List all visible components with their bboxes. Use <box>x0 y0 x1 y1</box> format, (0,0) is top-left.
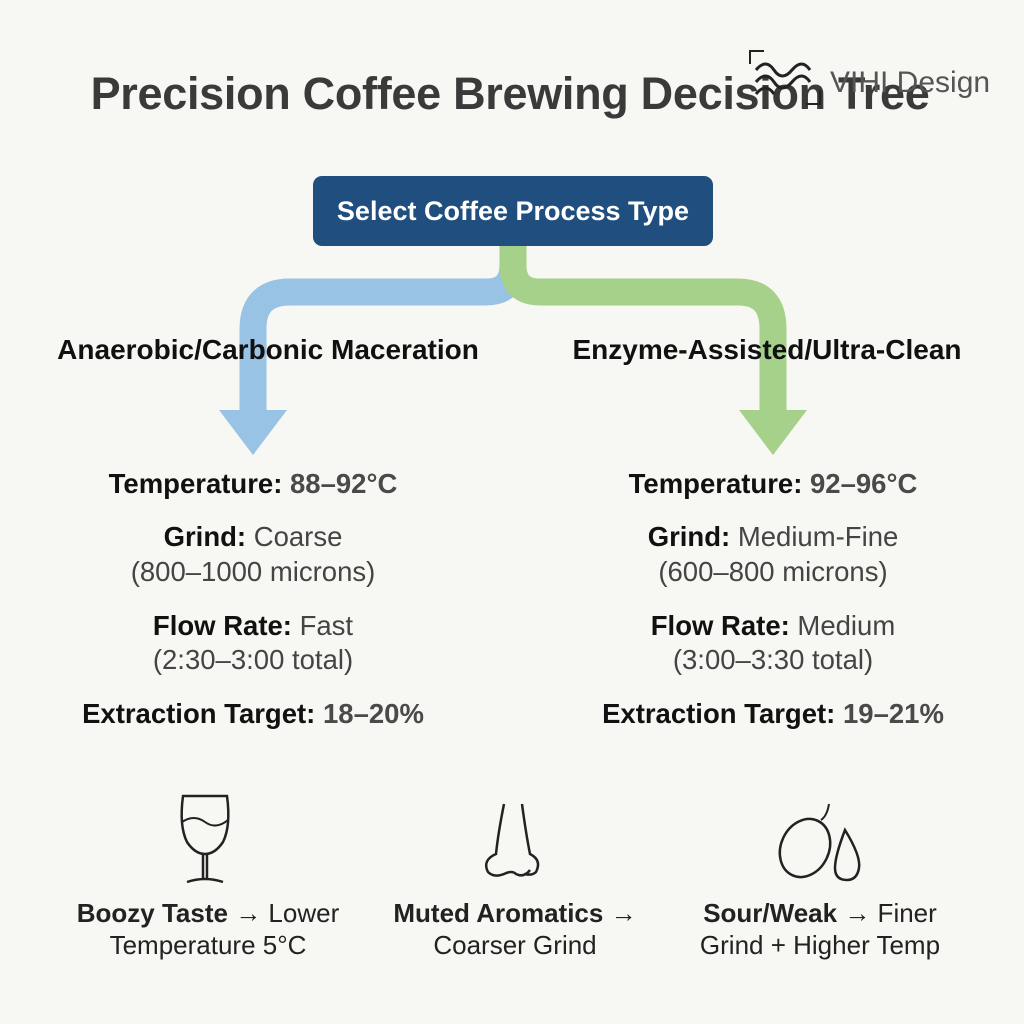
logo <box>749 50 990 105</box>
panel: right parameters: Temperature: 92–96°C <box>629 468 917 499</box>
panel: left parameters: Extraction Target: 18–20% <box>82 698 424 729</box>
caption: sour: Sour/Weak → Finer <box>703 898 937 928</box>
caption: boozy <box>77 898 339 960</box>
panel: right parameters: Flow Rate: Medium <box>651 610 895 641</box>
panel: right parameters: (600–800 microns) <box>658 556 888 587</box>
decision box: Select Coffee Process Type <box>337 196 689 226</box>
title: Precision Coffee Brewing Decision Tree <box>91 68 929 119</box>
panel: left parameters: Temperature: 88–92°C <box>109 468 397 499</box>
caption: boozy: Temperature 5°C <box>110 930 306 960</box>
panel: left parameters: (800–1000 microns) <box>131 556 375 587</box>
panel: right parameters: Extraction Target: 19–21% <box>602 698 944 729</box>
caption: boozy: Boozy Taste → Lower <box>77 898 339 928</box>
decision box <box>313 176 713 246</box>
panel: right parameters: (3:00–3:30 total) <box>673 644 873 675</box>
panel: left parameters: (2:30–3:00 total) <box>153 644 353 675</box>
caption: muted aromatics <box>393 898 637 960</box>
branch label right: Enzyme-Assisted/Ultra-Clean <box>572 334 962 365</box>
panel: left parameters: Flow Rate: Fast <box>153 610 353 641</box>
panel: right parameters: Grind: Medium-Fine <box>648 521 898 552</box>
branch label left: Anaerobic/Carbonic Maceration <box>57 334 479 365</box>
caption: sour: Grind + Higher Temp <box>700 930 940 960</box>
icon: nose <box>484 804 540 877</box>
caption: sour <box>700 898 940 960</box>
logo: VIHI Design <box>830 66 990 99</box>
arrow: blue left branch <box>219 246 513 455</box>
caption: muted aromatics: Muted Aromatics → <box>393 898 637 928</box>
panel: left parameters <box>82 468 424 729</box>
panel: left parameters: Grind: Coarse <box>164 521 342 552</box>
arrow: green right branch <box>513 246 807 455</box>
caption: muted aromatics: Coarser Grind <box>433 930 597 960</box>
icon: wine glass <box>180 794 230 884</box>
icon: lemon and drop <box>778 804 860 882</box>
panel: right parameters <box>602 468 944 729</box>
